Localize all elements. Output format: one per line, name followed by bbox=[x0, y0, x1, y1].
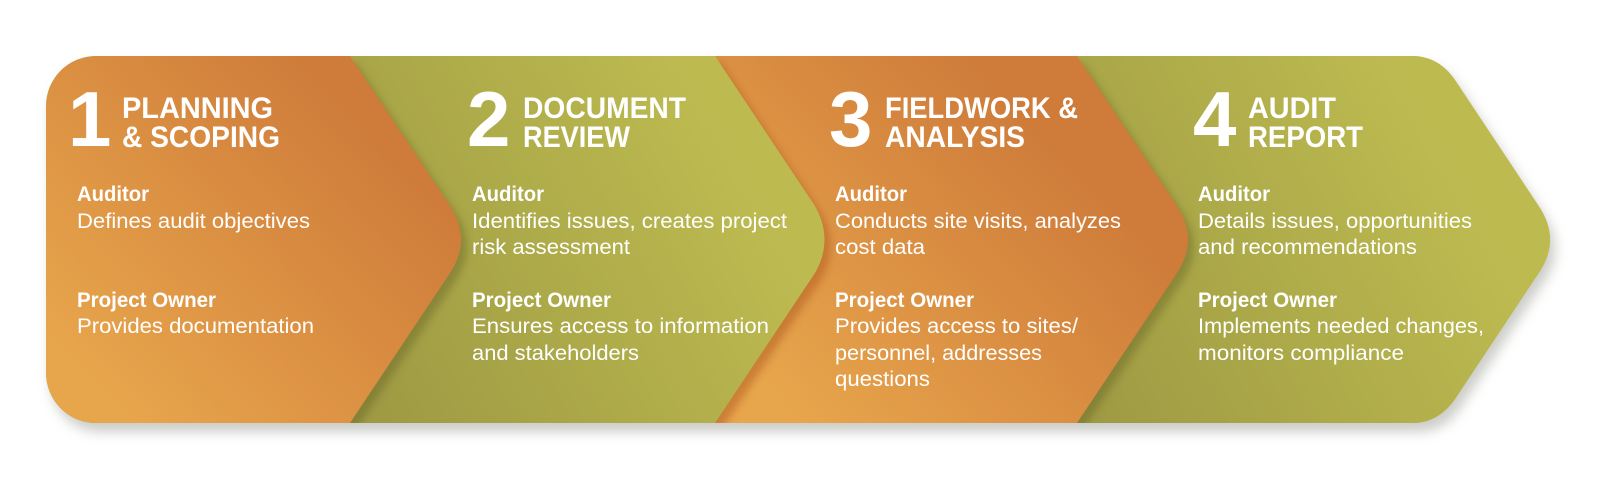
text block: project owner role: questions bbox=[835, 368, 930, 391]
text block: auditor role: Details issues, opportunities bbox=[1198, 210, 1472, 233]
heading: audit report bbox=[1248, 92, 1363, 154]
number 3: 3 bbox=[829, 75, 872, 163]
heading: planning and scoping: PLANNING bbox=[122, 92, 273, 125]
heading: fieldwork and analysis: ANALYSIS bbox=[885, 121, 1025, 154]
panel: step 1 planning and scoping bbox=[46, 56, 461, 423]
text block: auditor role bbox=[77, 183, 310, 233]
text block: auditor role: Auditor bbox=[835, 183, 907, 206]
arrow shape: step 4 bbox=[1000, 56, 1550, 423]
text block: auditor role: Conducts site visits, analyzes bbox=[835, 210, 1121, 233]
text block: project owner role bbox=[472, 289, 769, 365]
heading: document review: REVIEW bbox=[523, 121, 631, 154]
heading: document review: DOCUMENT bbox=[523, 92, 686, 125]
text block: project owner role: Project Owner bbox=[1198, 289, 1337, 312]
text block: project owner role: Ensures access to information bbox=[472, 315, 769, 338]
text block: auditor role: Defines audit objectives bbox=[77, 210, 310, 233]
outer drop shadow of whole chevron band bbox=[46, 56, 1550, 423]
text block: project owner role: monitors compliance bbox=[1198, 342, 1404, 365]
number 4: 4 bbox=[1193, 75, 1236, 163]
arrow shape: step 1 bbox=[46, 56, 461, 423]
heading: fieldwork and analysis bbox=[885, 92, 1078, 154]
heading: planning and scoping: & SCOPING bbox=[122, 121, 280, 154]
number 1: 1 bbox=[68, 75, 111, 163]
text block: project owner role: Project Owner bbox=[835, 289, 974, 312]
text block: auditor role: cost data bbox=[835, 236, 925, 259]
text block: project owner role: and stakeholders bbox=[472, 342, 639, 365]
text block: project owner role: Provides access to sites/ bbox=[835, 315, 1078, 338]
text block: auditor role bbox=[835, 183, 1121, 259]
panel: step 3 fieldwork and analysis bbox=[715, 56, 1196, 423]
text block: auditor role: risk assessment bbox=[472, 236, 630, 259]
number 2: 2 bbox=[467, 75, 510, 163]
arrow shape: step 2 bbox=[350, 56, 833, 423]
heading: planning and scoping bbox=[122, 92, 280, 154]
text block: auditor role: and recommendations bbox=[1198, 236, 1417, 259]
heading: audit report: AUDIT bbox=[1248, 92, 1336, 125]
text block: project owner role: Project Owner bbox=[472, 289, 611, 312]
heading: audit report: REPORT bbox=[1248, 121, 1363, 154]
text block: project owner role bbox=[77, 289, 314, 338]
text block: project owner role bbox=[1198, 289, 1484, 365]
text block: auditor role bbox=[472, 183, 787, 259]
heading: fieldwork and analysis: FIELDWORK & bbox=[885, 92, 1078, 125]
panel: step 4 audit report bbox=[1000, 56, 1550, 423]
text block: auditor role: Auditor bbox=[1198, 183, 1270, 206]
text block: auditor role: Auditor bbox=[77, 183, 149, 206]
arrow shape: step 3 bbox=[715, 56, 1196, 423]
text block: project owner role: Project Owner bbox=[77, 289, 216, 312]
text block: auditor role: Identifies issues, creates project bbox=[472, 210, 787, 233]
text block: project owner role: Provides documentation bbox=[77, 315, 314, 338]
text block: project owner role: personnel, addresses bbox=[835, 342, 1042, 365]
panel: step 2 document review bbox=[350, 56, 833, 423]
heading: document review bbox=[523, 92, 686, 154]
text block: auditor role: Auditor bbox=[472, 183, 544, 206]
text block: project owner role: Implements needed changes, bbox=[1198, 315, 1484, 338]
text block: project owner role bbox=[835, 289, 1078, 391]
text block: auditor role bbox=[1198, 183, 1472, 259]
